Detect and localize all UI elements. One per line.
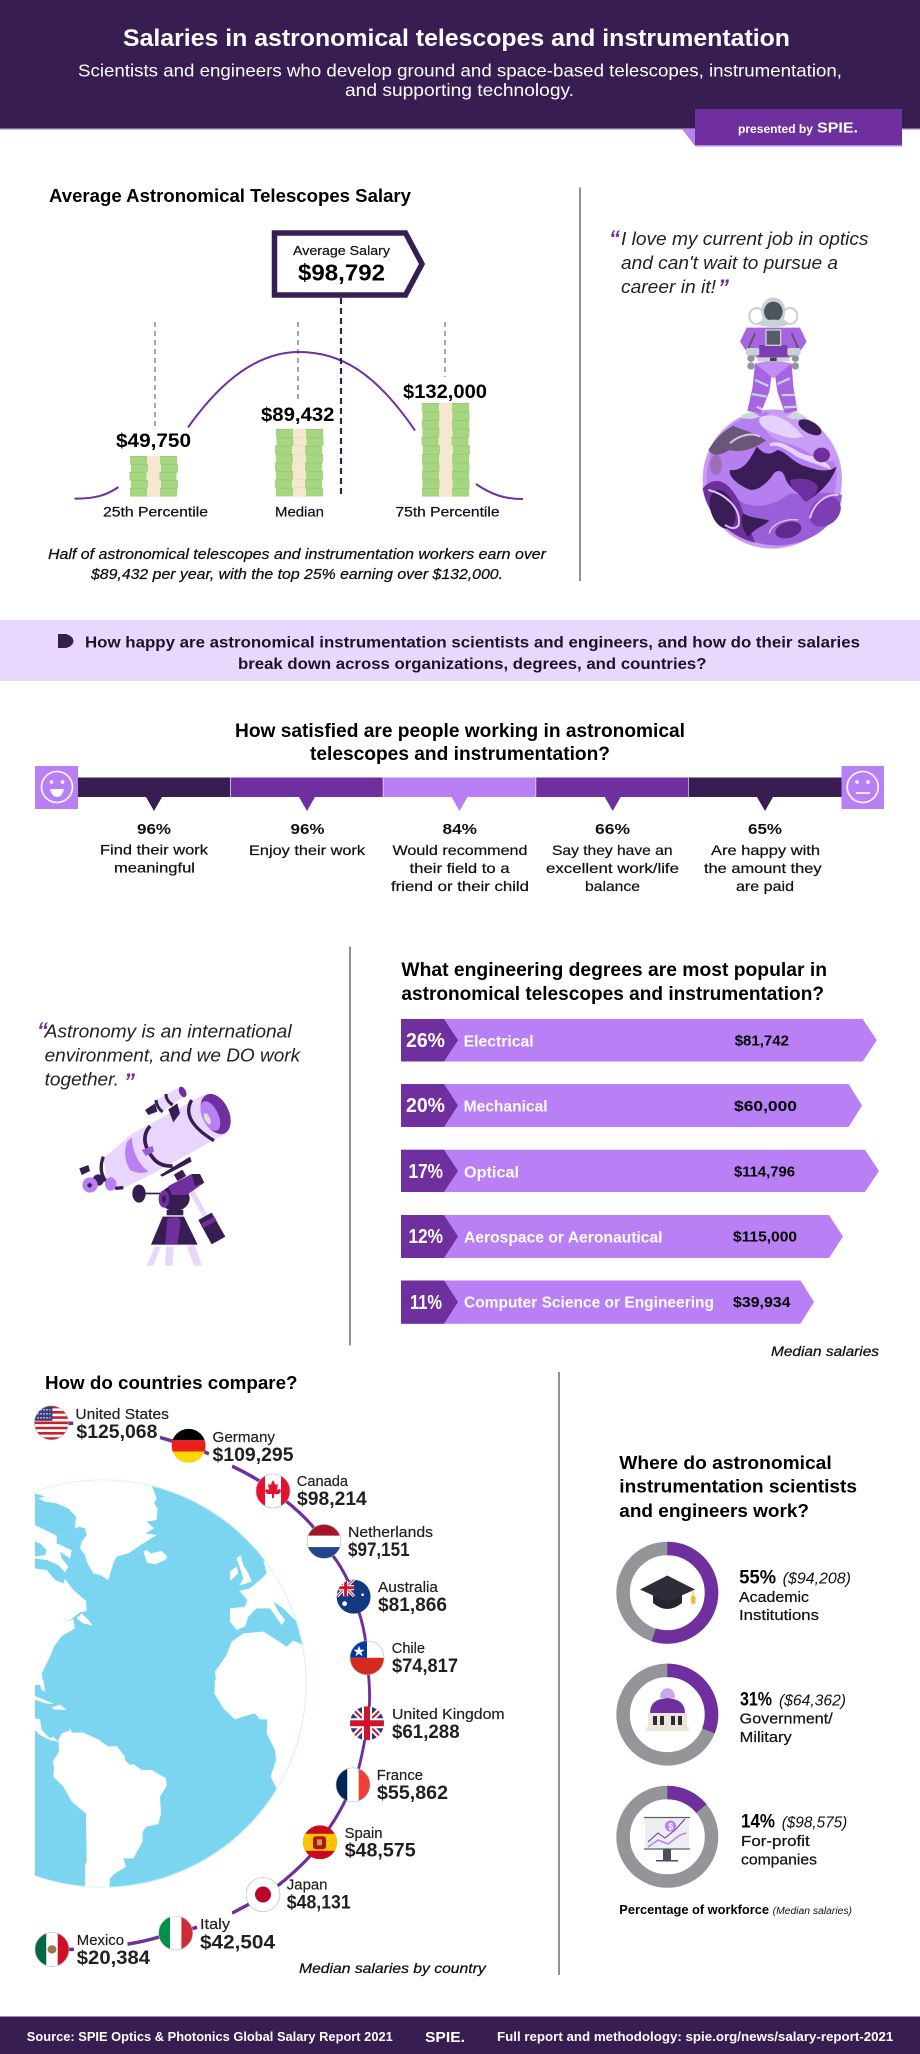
- icon: neutral face: [842, 766, 884, 809]
- stat: enjoy: Enjoy their work: [249, 842, 366, 858]
- bar: mechanical: $60,000: [734, 1098, 797, 1115]
- country: Italy: [159, 1916, 275, 1954]
- donut: academic: Academic: [739, 1589, 810, 1606]
- quote: international: “: [37, 1018, 48, 1043]
- bar segments: [78, 778, 842, 811]
- country: United Kingdom: $61,288: [392, 1722, 460, 1743]
- percentile guide lines: [155, 322, 445, 427]
- value: median: $89,432: [261, 404, 335, 426]
- heading: average salary: Average Astronomical Telescopes Salary: [49, 186, 411, 206]
- country: Mexico: [35, 1932, 150, 1969]
- footer: SPIE.: [425, 2029, 465, 2046]
- bar: aerospace: $115,000: [733, 1228, 797, 1246]
- icon: profit chart: [644, 1818, 690, 1862]
- country: Italy: $42,504: [200, 1932, 275, 1954]
- icon: graduation cap: [640, 1576, 696, 1609]
- quote: international: ”: [124, 1069, 135, 1094]
- country: Chile: [350, 1640, 458, 1677]
- donut: academic: Institutions: [739, 1607, 819, 1624]
- country: United Kingdom: United Kingdom: [392, 1706, 505, 1723]
- country: Italy: Italy: [200, 1916, 231, 1933]
- stat: recommend: [391, 821, 529, 894]
- country: France: France: [377, 1767, 423, 1784]
- bar: optical: Optical: [464, 1164, 519, 1182]
- salary distribution chart: [74, 233, 523, 520]
- satisfaction scale: [35, 766, 884, 894]
- note: median salaries: Median salaries: [771, 1344, 879, 1359]
- quote: international: environment, and we DO work: [45, 1044, 302, 1066]
- note: workforce: Percentage of workforce: [619, 1903, 769, 1917]
- heading: degrees: [401, 960, 827, 1005]
- stat: work/life: Say they have an: [552, 842, 672, 858]
- country: Japan: [246, 1877, 351, 1914]
- stat: work/life: 66%: [595, 821, 630, 838]
- quote: optics career: “: [609, 226, 620, 251]
- donut: for-profit: companies: [741, 1851, 817, 1868]
- donut: government: [623, 1670, 846, 1759]
- country: Netherlands: Netherlands: [348, 1524, 433, 1541]
- bar: computer science: 11%: [410, 1291, 442, 1314]
- stat: paid: Are happy with: [711, 842, 820, 858]
- stat: recommend: 84%: [442, 821, 477, 838]
- money stack: 25th percentile: [130, 456, 178, 497]
- bar: mechanical: Mechanical: [464, 1098, 548, 1116]
- question band: How happy are astronomical instrumentation scientists and engineers, and how do their salaries: [85, 634, 860, 652]
- bar: mechanical: 20%: [406, 1094, 445, 1117]
- axis labels: Median: [275, 504, 324, 520]
- heading: where they work: and engineers work?: [619, 1500, 809, 1521]
- country: Spain: Spain: [345, 1825, 382, 1842]
- country: Japan: Japan: [287, 1877, 328, 1894]
- quote: optics career: ”: [718, 275, 729, 300]
- country: Germany: $109,295: [212, 1445, 294, 1466]
- presented by tag: [682, 109, 902, 146]
- astronaut: [740, 297, 807, 419]
- donut: academic: ($94,208): [783, 1570, 851, 1588]
- title: Salaries in astronomical telescopes and instrumentation: [123, 25, 790, 52]
- donut: academic: [623, 1548, 851, 1637]
- heading: degrees: astronomical telescopes and instrumentation?: [401, 984, 824, 1005]
- heading: satisfaction: telescopes and instrumentation?: [310, 744, 610, 765]
- bar: computer science: $39,934: [733, 1294, 791, 1311]
- axis labels: 25th Percentile: [103, 504, 208, 520]
- country: United States: [34, 1406, 169, 1443]
- country: Australia: Australia: [378, 1579, 439, 1596]
- country: Chile: $74,817: [392, 1656, 458, 1677]
- bar: optical: $114,796: [734, 1164, 795, 1180]
- value: 75th percentile: $132,000: [403, 381, 487, 403]
- salary caption: $89,432 per year, with the top 25% earning over $132,000.: [90, 567, 503, 583]
- presented by tag: presented by: [738, 124, 814, 136]
- stat: meaningful: meaningful: [114, 860, 195, 876]
- donut: government: 31%: [740, 1690, 772, 1711]
- bar: electrical: $81,742: [735, 1032, 789, 1050]
- country: Chile: Chile: [392, 1640, 425, 1657]
- heading: where they work: instrumentation scientists: [619, 1476, 857, 1497]
- bell curve: [74, 352, 523, 499]
- money stack: median: [275, 429, 324, 496]
- note: median by country: Median salaries by country: [299, 1960, 487, 1976]
- note: workforce: (Median salaries): [773, 1906, 852, 1917]
- subtitle: [78, 60, 842, 100]
- stat: paid: the amount they: [704, 860, 822, 876]
- axis labels: [103, 504, 500, 520]
- donut: academic: 55%: [739, 1568, 776, 1588]
- stat: paid: 65%: [748, 821, 782, 838]
- bar: aerospace: 12%: [408, 1225, 443, 1248]
- stat: meaningful: Find their work: [100, 842, 209, 858]
- stat: paid: are paid: [736, 878, 794, 894]
- donut: for-profit: For-profit: [741, 1833, 811, 1850]
- bar: electrical: Electrical: [464, 1034, 534, 1050]
- footer: Source: SPIE Optics & Photonics Global Salary Report 2021: [27, 2030, 393, 2044]
- heading: where they work: [619, 1452, 857, 1521]
- country: Canada: Canada: [297, 1473, 349, 1490]
- donut: for-profit: 14%: [741, 1812, 775, 1833]
- stat: work/life: excellent work/life: [546, 860, 679, 876]
- icon: telescope: [79, 1085, 237, 1266]
- country: United States: $125,068: [76, 1422, 157, 1443]
- heading: satisfaction: [235, 721, 685, 765]
- stat: work/life: [546, 821, 679, 894]
- bar: electrical: [401, 1019, 877, 1062]
- country: Netherlands: $97,151: [348, 1540, 410, 1561]
- salary caption: Half of astronomical telescopes and instrumentation workers earn over: [48, 547, 547, 563]
- salary path line: [68, 1423, 370, 1949]
- quote: international: Astronomy is an international: [44, 1021, 293, 1042]
- donut: government: Military: [740, 1729, 792, 1746]
- stat: recommend: Would recommend: [392, 842, 528, 858]
- footer: [0, 2016, 920, 2054]
- country: Mexico: Mexico: [77, 1932, 124, 1949]
- donut: government: ($64,362): [779, 1693, 846, 1710]
- stat: recommend: their field to a: [410, 860, 510, 876]
- country: France: $55,862: [377, 1783, 448, 1804]
- country: United Kingdom: [350, 1706, 505, 1743]
- footer: Full report and methodology: spie.org/news/salary-report-2021: [497, 2030, 893, 2044]
- icon: happy face: [35, 766, 78, 809]
- heading: where they work: Where do astronomical: [619, 1452, 832, 1473]
- country: Spain: [303, 1825, 416, 1862]
- donut: for-profit: ($98,575): [782, 1815, 847, 1832]
- country: United States: United States: [75, 1406, 169, 1423]
- country: Spain: $48,575: [345, 1840, 416, 1862]
- country: Canada: $98,214: [297, 1489, 367, 1510]
- subtitle: and supporting technology.: [345, 80, 574, 100]
- stat: paid: [704, 821, 822, 894]
- country: Japan: $48,131: [287, 1893, 351, 1914]
- bar: computer science: Computer Science or Engineering: [464, 1294, 714, 1312]
- heading: degrees: What engineering degrees are most popular in: [401, 960, 827, 981]
- bar: mechanical: [401, 1084, 862, 1127]
- country: Canada: [256, 1473, 367, 1510]
- header banner: [0, 0, 920, 130]
- average salary callout: Average Salary: [293, 243, 391, 258]
- bar: optical: [401, 1150, 879, 1192]
- stat: meaningful: 96%: [137, 821, 171, 838]
- bar: aerospace: Aerospace or Aeronautical: [464, 1230, 662, 1246]
- bar: optical: 17%: [408, 1160, 443, 1183]
- quote: international: together.: [45, 1069, 119, 1090]
- country: Mexico: $20,384: [77, 1948, 150, 1969]
- donut: for-profit: [623, 1793, 847, 1881]
- bar: aerospace: [401, 1215, 843, 1258]
- globe: [35, 1480, 306, 1888]
- value: 25th percentile: $49,750: [116, 430, 191, 452]
- quote: optics career: [609, 226, 868, 300]
- note: workforce: [619, 1903, 852, 1917]
- presented by tag: SPIE.: [817, 120, 858, 136]
- axis labels: 75th Percentile: [396, 504, 500, 520]
- donut: government: Government/: [740, 1711, 834, 1728]
- icon: band marker: [58, 634, 74, 648]
- icon: astronaut on planet: [703, 297, 847, 549]
- quote: international: [37, 1018, 302, 1094]
- icon: profit chart: $: [668, 1822, 673, 1832]
- average salary callout: $98,792: [298, 260, 385, 286]
- question band: break down across organizations, degrees, and countries?: [238, 656, 706, 673]
- subtitle: Scientists and engineers who develop ground and space-based telescopes, instrumentation,: [78, 60, 842, 80]
- country: Australia: [337, 1579, 447, 1616]
- money stack: 75th percentile: [422, 403, 470, 497]
- country: Germany: [172, 1429, 294, 1466]
- quote: optics career: and can't wait to pursue a: [621, 252, 838, 273]
- quote: optics career: I love my current job in optics: [621, 228, 868, 249]
- stat: enjoy: [249, 821, 366, 858]
- stat: recommend: friend or their child: [391, 878, 529, 894]
- question band: [0, 620, 920, 681]
- heading: countries: How do countries compare?: [45, 1372, 298, 1393]
- salary caption: [48, 547, 547, 583]
- heading: satisfaction: How satisfied are people working in astronomical: [235, 721, 685, 742]
- country: Australia: $81,866: [378, 1595, 447, 1616]
- bar: computer science: [401, 1280, 814, 1324]
- stat: enjoy: 96%: [290, 821, 324, 838]
- quote: optics career: career in it!: [621, 276, 716, 297]
- bar: electrical: 26%: [406, 1029, 445, 1052]
- average salary callout: [274, 233, 422, 295]
- stat: meaningful: [100, 821, 209, 876]
- icon: government building: [646, 1688, 689, 1731]
- country: Germany: Germany: [212, 1429, 276, 1446]
- average line: [340, 298, 342, 497]
- stat: work/life: balance: [585, 878, 640, 894]
- country: Netherlands: [307, 1524, 433, 1561]
- country: France: [336, 1767, 448, 1804]
- planet: [703, 409, 847, 549]
- degree bars: [401, 1019, 879, 1324]
